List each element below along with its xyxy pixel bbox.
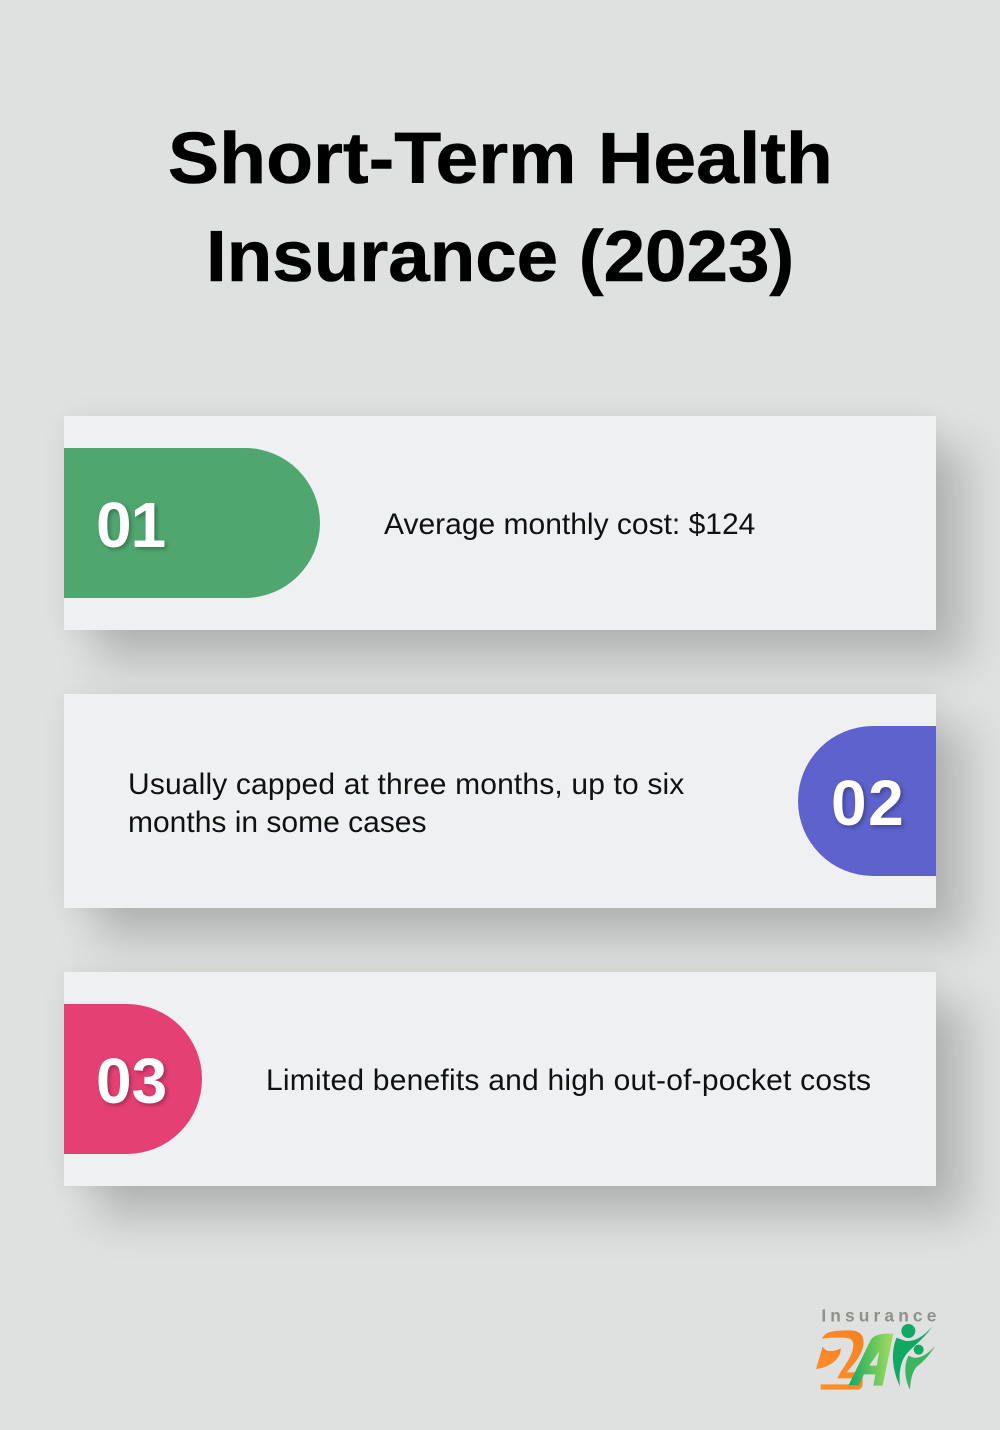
title: Short-Term Health bbox=[167, 119, 833, 199]
text: limited benefits: Limited benefits and high out-of-pocket costs bbox=[266, 1064, 871, 1097]
panel: item 02 bbox=[64, 694, 936, 908]
badge: 03: 03 bbox=[96, 1045, 167, 1117]
badge: 01: 01 bbox=[96, 489, 165, 561]
logo: Insurance 2A: Insurance bbox=[821, 1306, 937, 1326]
title bbox=[167, 119, 833, 297]
badge: 02: 02 bbox=[831, 767, 905, 839]
logo: Insurance 2A bbox=[816, 1306, 937, 1390]
text: average monthly cost: Average monthly cost: $124 bbox=[384, 508, 755, 541]
text: duration cap: Usually capped at three months, up to six bbox=[128, 768, 684, 801]
badge: 01 bbox=[64, 448, 320, 598]
badge: 02 bbox=[798, 726, 936, 876]
panel: item 03 bbox=[64, 972, 936, 1186]
badge: 03 bbox=[64, 1004, 202, 1154]
text: duration cap bbox=[128, 768, 684, 839]
panel: item 01 bbox=[64, 416, 936, 630]
title: Insurance (2023) bbox=[206, 217, 794, 297]
text: duration cap: months in some cases bbox=[128, 806, 426, 839]
